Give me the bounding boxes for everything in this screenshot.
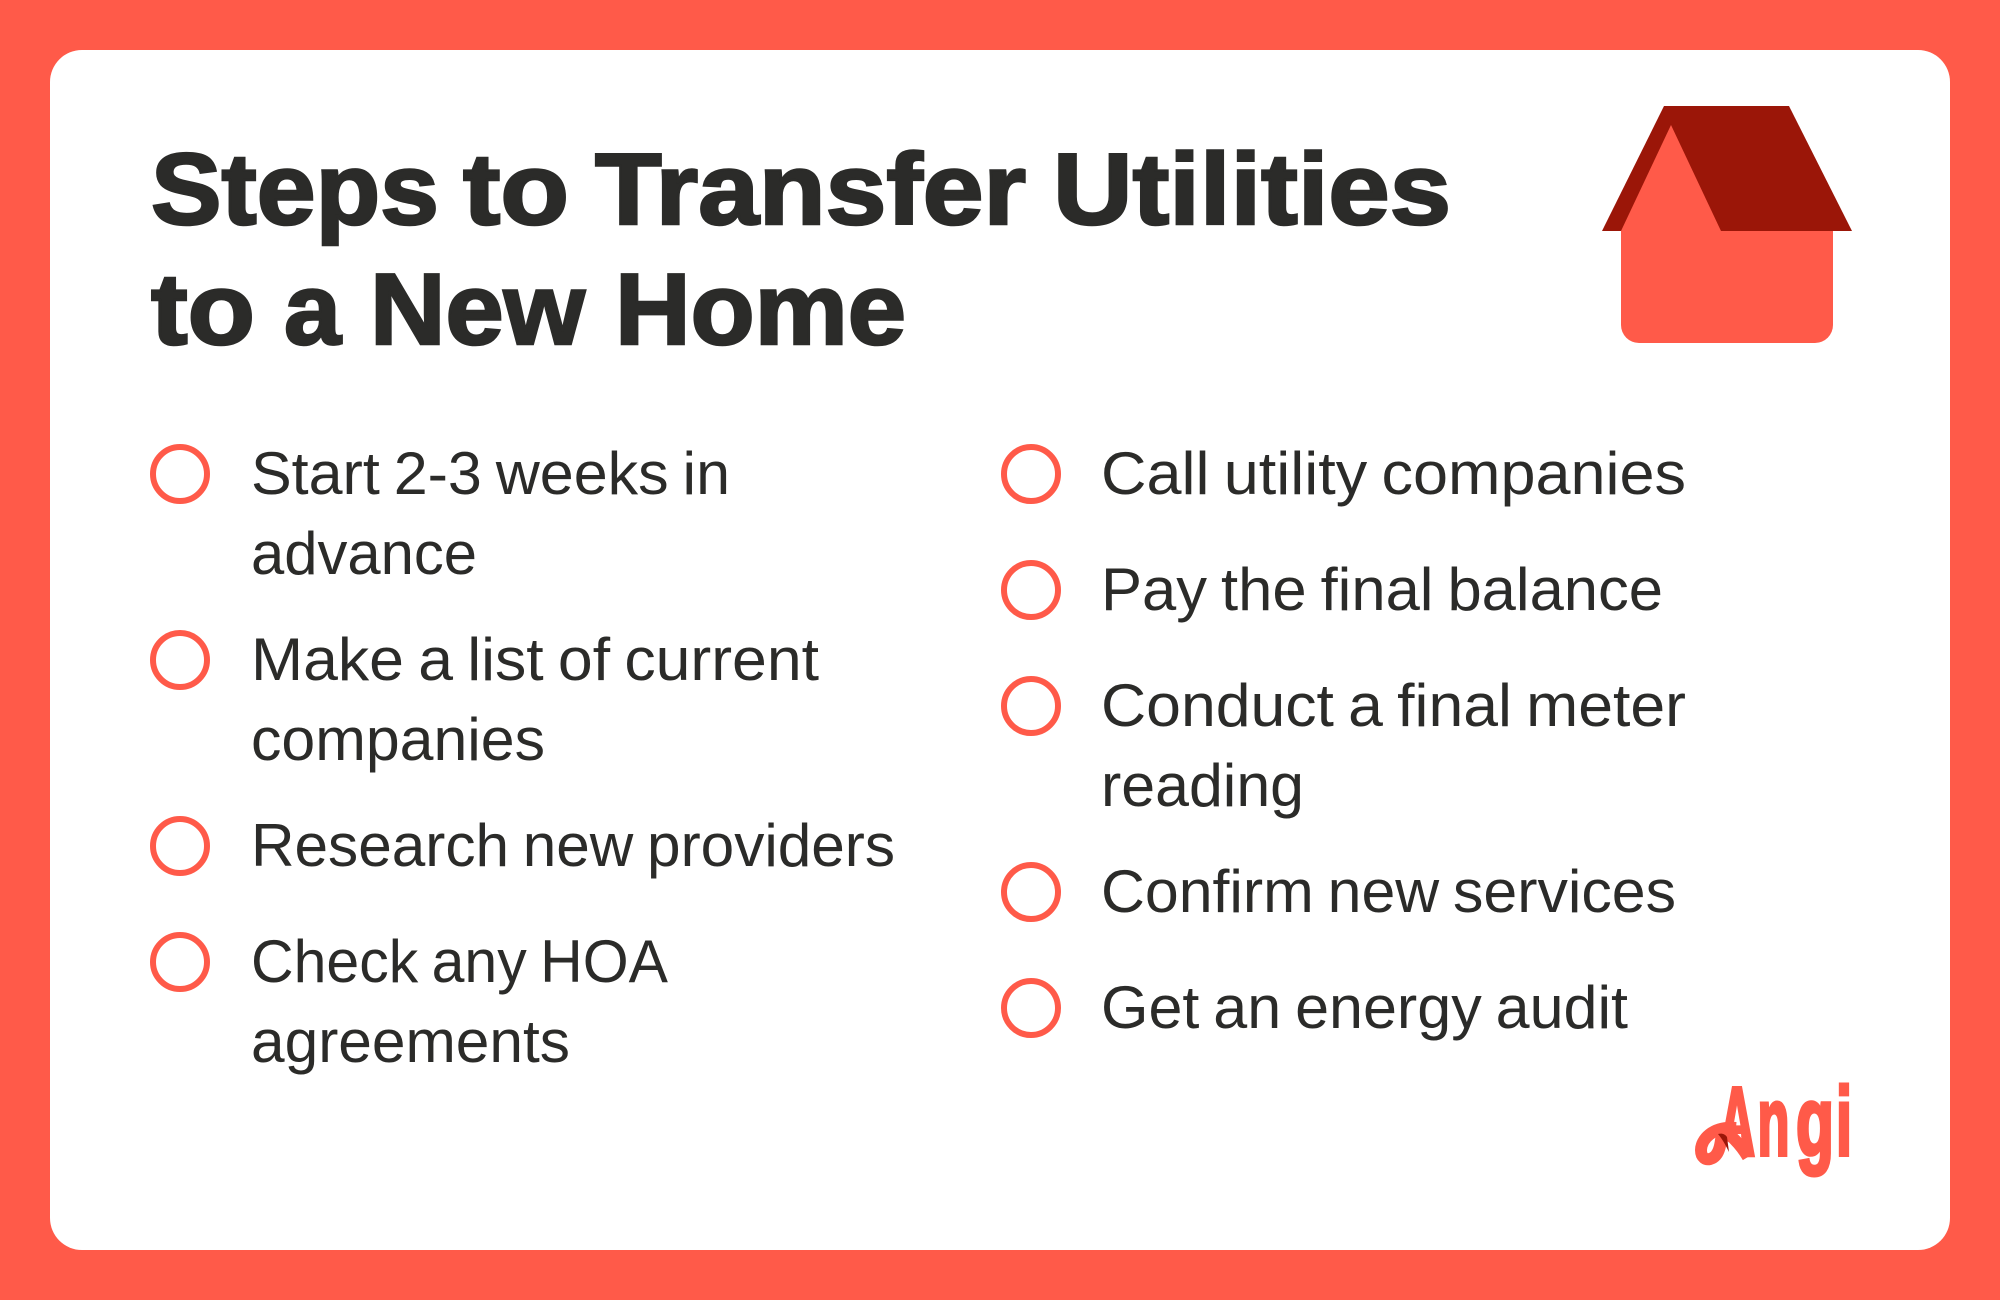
step: start early: Start 2-3 weeks in	[251, 440, 730, 507]
title: Steps	[151, 134, 439, 246]
icon: house	[1602, 106, 1852, 343]
step: meter reading: reading	[1101, 752, 1304, 819]
title: to	[151, 254, 255, 366]
step: list companies	[153, 626, 819, 773]
step: call utilities: Call utility companies	[1101, 440, 1686, 507]
step: energy audit: Get an energy audit	[1101, 974, 1628, 1041]
step: start early: advance	[251, 520, 477, 587]
logo: Angi	[1695, 1082, 1850, 1178]
step: start early	[153, 440, 730, 587]
logo: Angi: i	[1836, 1067, 1852, 1176]
title: Home	[615, 254, 906, 366]
title: a	[284, 254, 342, 366]
title: New	[370, 254, 585, 366]
title: to	[463, 134, 569, 246]
title: Utilities	[1053, 134, 1451, 246]
step: confirm services: Confirm new services	[1101, 858, 1676, 925]
logo: Angi: n	[1758, 1067, 1790, 1176]
title: Transfer	[595, 134, 1026, 246]
step: meter reading	[1004, 672, 1686, 819]
logo: Angi: g	[1796, 1067, 1834, 1176]
step: list companies: Make a list of current	[251, 626, 819, 693]
step: final balance: Pay the final balance	[1101, 556, 1663, 623]
left checklist	[153, 440, 895, 1075]
right checklist	[1004, 440, 1686, 1041]
logo: Angi: A	[1719, 1067, 1755, 1176]
step: HOA agreements: Check any HOA	[251, 928, 668, 995]
step: list companies: companies	[251, 706, 545, 773]
step: meter reading: Conduct a final meter	[1101, 672, 1686, 739]
step: HOA agreements: agreements	[251, 1008, 570, 1075]
step: research providers: Research new providers	[251, 812, 895, 879]
step: HOA agreements	[153, 928, 668, 1075]
title	[151, 134, 1451, 366]
